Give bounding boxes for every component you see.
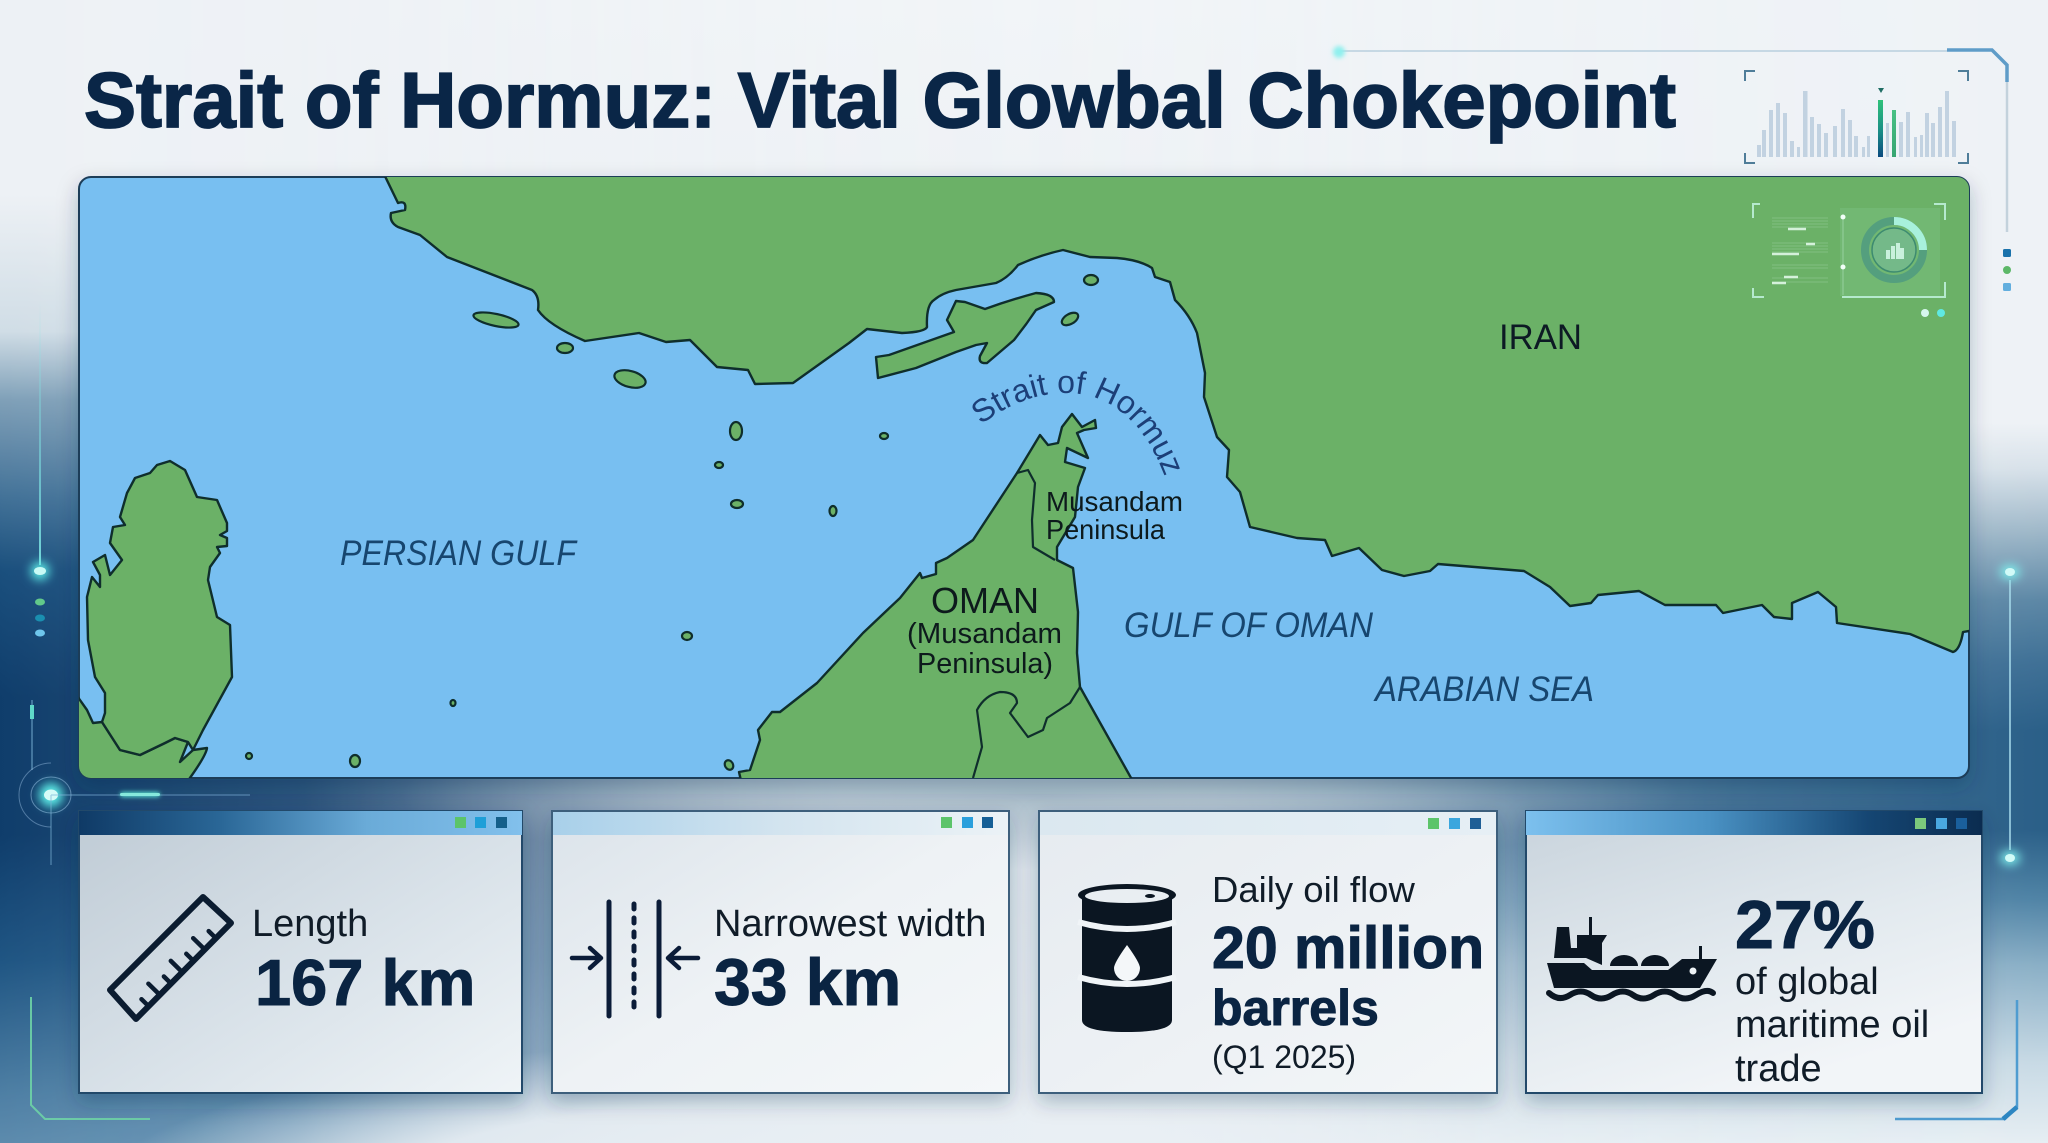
value: 167 km: 167 km <box>255 946 475 1019</box>
left edge decoration: nodes and circuit lines <box>19 300 250 865</box>
map overlay: dashboard widget <box>1753 204 1945 317</box>
label: of global maritime oil trade: maritime oil <box>1735 1004 1929 1046</box>
value: 27%: 27% <box>1735 887 1875 963</box>
map label: Gulf of Oman: GULF OF OMAN <box>1124 606 1374 645</box>
label: length: Length <box>252 903 368 945</box>
label: of global maritime oil trade: of global <box>1735 961 1879 1003</box>
map label: Iran: IRAN <box>1499 318 1582 357</box>
value: 20 million barrels: barrels <box>1212 980 1379 1036</box>
bottom-right corner bracket <box>1895 1000 2017 1119</box>
panel: narrowest width <box>552 811 1009 1093</box>
label: of global maritime oil trade: trade <box>1735 1048 1822 1090</box>
card header bar <box>1526 811 1982 835</box>
label: narrowest width: Narrowest width <box>714 903 986 945</box>
title: Strait of Hormuz: Vital Glowbal Chokepoint <box>84 56 1676 144</box>
icon: oil barrel with drop <box>1078 884 1176 1032</box>
panel: daily oil flow <box>1039 811 1497 1093</box>
value: 20 million barrels <box>1212 915 1484 1036</box>
card header bar <box>79 811 522 835</box>
map label: Oman subtitle <box>907 618 1062 680</box>
map label: Musandam Peninsula: Peninsula <box>1046 514 1165 545</box>
map land: lower-left coast <box>79 696 208 778</box>
map land: Oman and Musandam Peninsula <box>739 414 1135 785</box>
map label: Musandam Peninsula: Musandam <box>1046 486 1183 517</box>
bottom-left corner bracket <box>31 997 150 1119</box>
card header bar <box>1040 812 1496 835</box>
map borders: Oman interior lines <box>973 470 1080 778</box>
map land: Qatar <box>87 461 232 755</box>
value: 20 million barrels: 20 million <box>1212 915 1484 981</box>
decorative bar chart widget <box>1745 71 1968 163</box>
right edge decoration: nodes and lines <box>2000 565 2020 865</box>
card header bar <box>553 812 1008 835</box>
label: daily oil flow: Daily oil flow <box>1212 869 1415 910</box>
note: Q1 2025: (Q1 2025) <box>1212 1039 1356 1075</box>
icon: narrowing channel with arrows <box>572 902 698 1016</box>
map label: Strait of Hormuz: Strait of Hormuz <box>972 371 1180 476</box>
top-right frame line with status squares <box>1333 46 2011 291</box>
label: of global maritime oil trade <box>1735 961 1929 1090</box>
map label: Oman: OMAN <box>931 580 1039 621</box>
map label: Oman subtitle: Peninsula) <box>917 648 1053 680</box>
map land: Iran <box>382 170 1975 652</box>
map label: Oman subtitle: (Musandam <box>907 618 1062 650</box>
icon: ruler <box>110 897 231 1019</box>
map land: Qeshm island <box>876 293 1054 378</box>
value: 33 km: 33 km <box>714 945 901 1019</box>
map label: Arabian Sea: ARABIAN SEA <box>1373 670 1594 709</box>
map label: Musandam Peninsula <box>1046 486 1183 545</box>
panel: share of maritime oil trade <box>1526 811 1982 1093</box>
icon: oil tanker <box>1547 917 1717 998</box>
map islands <box>246 275 1098 771</box>
map label: Persian Gulf: PERSIAN GULF <box>340 534 578 573</box>
panel: map <box>67 172 1982 796</box>
panel: length <box>79 811 522 1093</box>
